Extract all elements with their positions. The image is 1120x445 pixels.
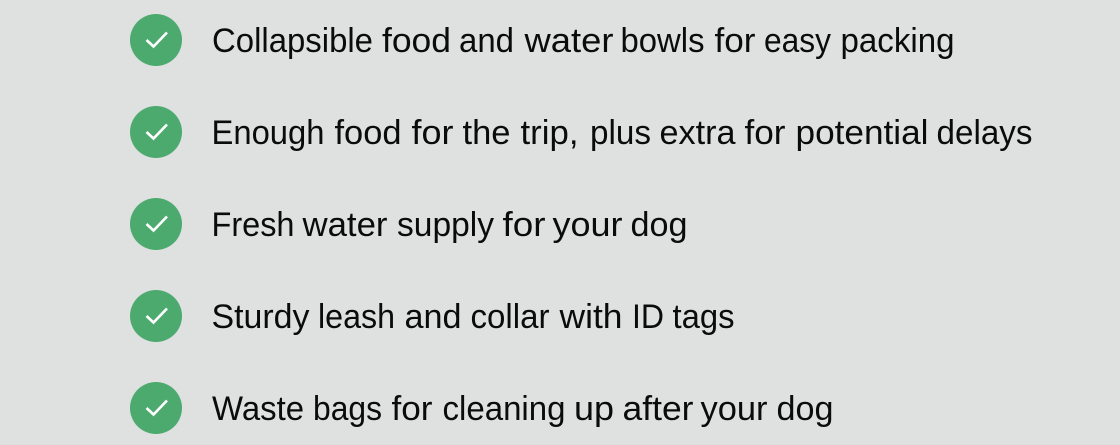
text: fresh water: your	[552, 206, 622, 244]
text: enough food: extra	[660, 114, 736, 152]
text: enough food: for	[744, 114, 786, 152]
text: collapsible bowls: packing	[840, 22, 954, 60]
icon: green check	[130, 382, 182, 434]
text: waste bags: Waste	[212, 390, 304, 428]
icon: green check	[130, 198, 182, 250]
text: enough food: food	[334, 114, 402, 152]
item: collapsible bowls	[130, 14, 954, 66]
text: enough food: for	[412, 114, 454, 152]
text: collapsible bowls: easy	[764, 22, 831, 60]
text: leash and collar: tags	[672, 298, 734, 336]
text: leash and collar: collar	[470, 298, 550, 336]
text: enough food: plus	[590, 114, 651, 152]
item: fresh water	[130, 198, 688, 250]
text: waste bags: dog	[776, 390, 834, 428]
text: collapsible bowls: food	[382, 22, 451, 60]
item: waste bags	[130, 382, 834, 434]
icon: green check	[130, 290, 182, 342]
text: enough food: potential	[796, 114, 928, 152]
text: leash and collar: and	[404, 298, 462, 336]
text: leash and collar: ID	[632, 298, 664, 336]
text: waste bags: bags	[313, 390, 382, 428]
text: collapsible bowls: water	[523, 22, 614, 60]
item: leash and collar	[130, 290, 734, 342]
item: enough food	[130, 106, 1032, 158]
text: fresh water: water	[301, 206, 388, 244]
text: fresh water: supply	[397, 206, 494, 244]
icon: green check	[130, 106, 182, 158]
text: waste bags: up	[574, 390, 614, 428]
text: enough food: Enough	[212, 114, 324, 152]
text: collapsible bowls: Collapsible	[212, 22, 373, 60]
text: waste bags: your	[700, 390, 768, 428]
text: collapsible bowls: for	[714, 22, 756, 60]
text: fresh water: dog	[630, 206, 688, 244]
text: fresh water: for	[502, 206, 546, 244]
text: fresh water: Fresh	[212, 206, 294, 244]
text: waste bags: for	[392, 390, 432, 428]
text: leash and collar: with	[558, 298, 622, 336]
text: enough food: trip,	[520, 114, 578, 152]
text: leash and collar: Sturdy	[212, 298, 310, 336]
text: waste bags: cleaning	[442, 390, 566, 428]
text: waste bags: after	[622, 390, 694, 428]
text: leash and collar: leash	[318, 298, 395, 336]
text: collapsible bowls: and	[459, 22, 514, 60]
text: enough food: delays	[936, 114, 1032, 152]
icon: green check	[130, 14, 182, 66]
text: enough food: the	[462, 114, 510, 152]
text: collapsible bowls: bowls	[620, 22, 704, 60]
